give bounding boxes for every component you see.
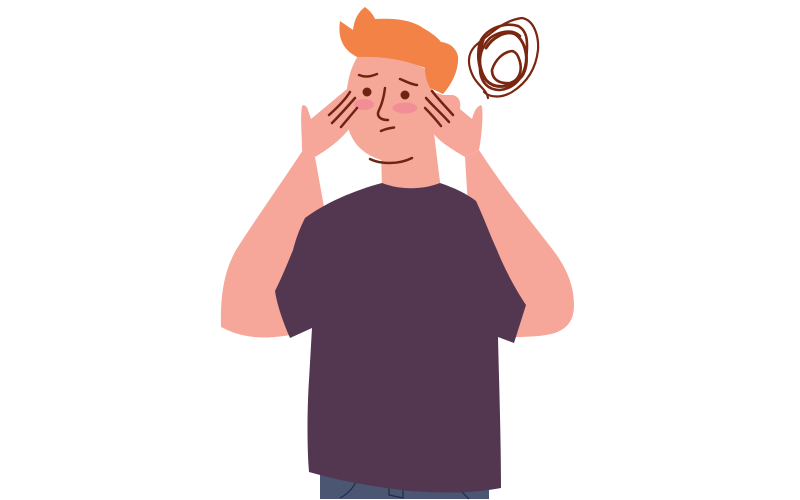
left arm	[221, 150, 330, 338]
t-shirt	[275, 183, 526, 493]
icon: tangled scribble of worry	[469, 18, 538, 98]
face	[346, 55, 434, 162]
right hand finger lines	[425, 91, 453, 126]
eyebrows	[359, 74, 417, 85]
right arm	[465, 150, 574, 337]
jeans	[320, 470, 489, 499]
left hand	[301, 89, 357, 157]
nose	[378, 88, 388, 120]
hair	[339, 7, 458, 94]
facial features	[329, 74, 453, 163]
neck	[381, 125, 441, 190]
mouth	[381, 128, 394, 131]
ear and right hand	[425, 92, 482, 157]
cheeks	[354, 99, 418, 114]
left hand finger lines	[329, 92, 357, 127]
chin line	[370, 158, 412, 163]
eyes	[362, 88, 410, 100]
